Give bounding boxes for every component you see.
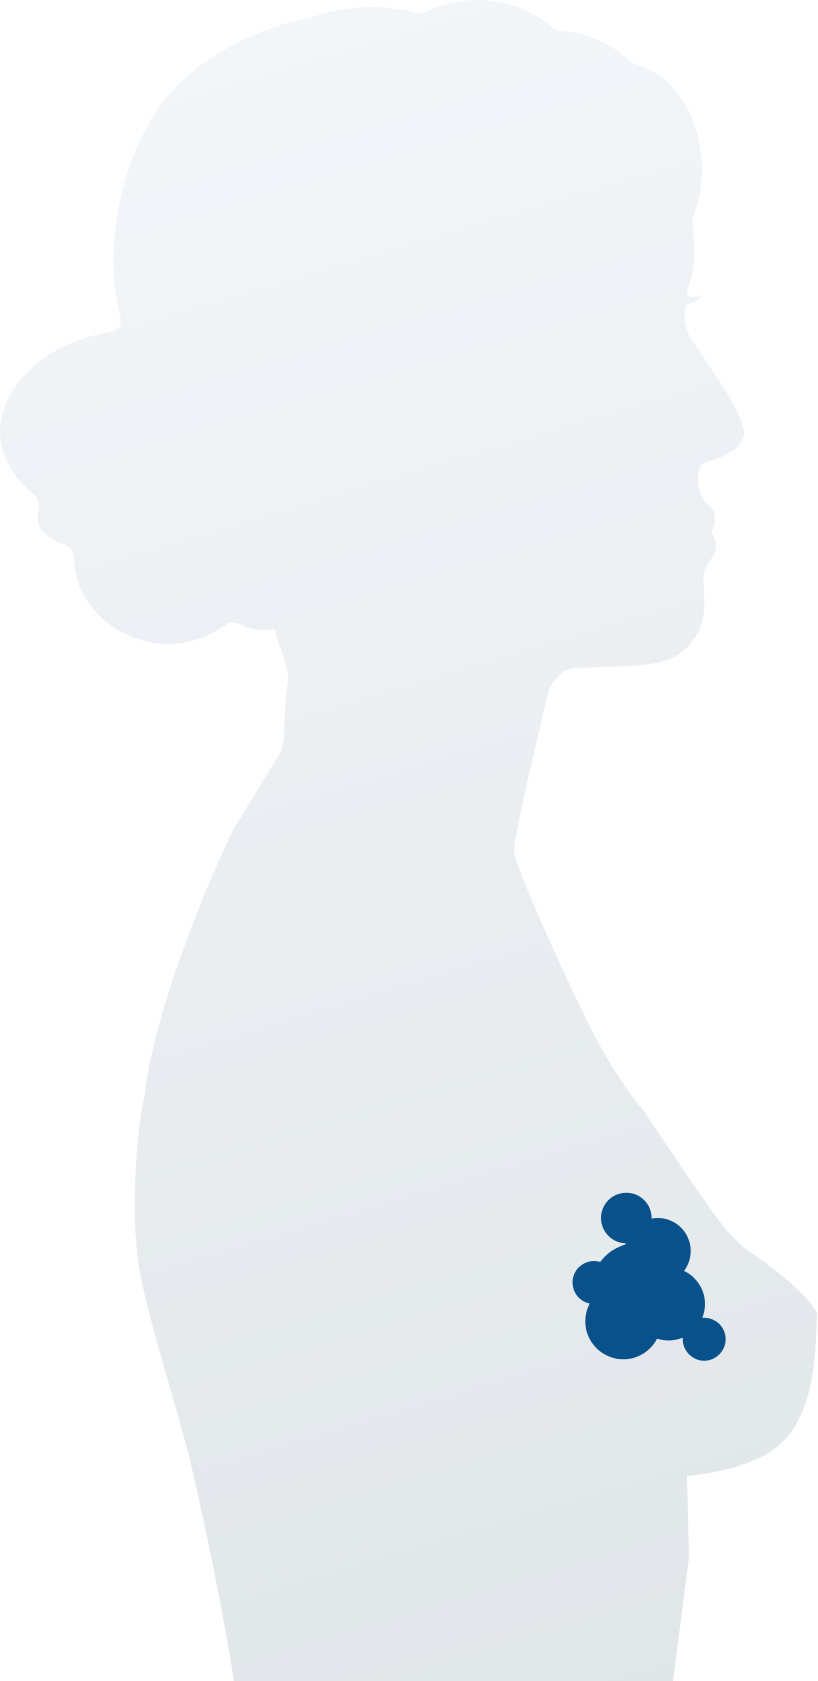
tumour: cluster of blue circles in the breast bbox=[572, 1193, 726, 1361]
